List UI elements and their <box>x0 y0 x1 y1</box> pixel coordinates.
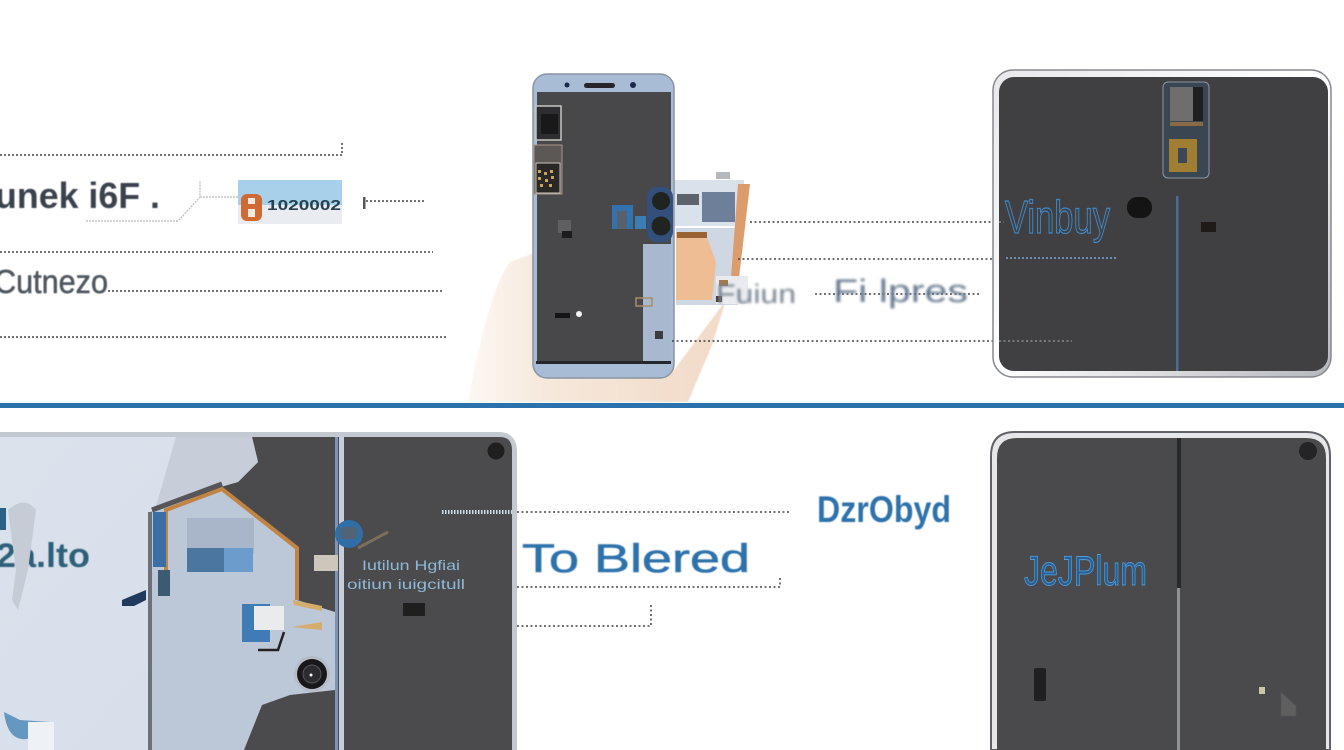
pale decorative marks <box>0 502 146 750</box>
centre label text: Fi lpres <box>833 273 968 309</box>
blue board block <box>187 518 254 572</box>
indicator dot <box>1259 687 1265 694</box>
blue sketched label on screen <box>1005 191 1117 258</box>
copper flex cable <box>166 489 297 600</box>
exploded internal module <box>674 172 750 305</box>
centre label text: Fuiun <box>716 279 796 309</box>
hand holding phone <box>468 253 726 402</box>
left leader lines, top section <box>0 142 446 337</box>
connector leader lines, centre <box>672 222 993 341</box>
blue board block with white label <box>242 600 322 650</box>
blue microtext on screen <box>347 557 465 592</box>
device: closed foldable, bottom right <box>991 432 1330 750</box>
camera hole <box>1127 197 1152 218</box>
lower leader lines <box>517 512 790 626</box>
callout: blue tag with orange badge: 1020002 <box>267 197 341 214</box>
right dotted hook <box>442 510 512 514</box>
blue sketched label on screen: Vinbuy <box>1005 191 1110 243</box>
label: To Blered: To Blered <box>522 537 750 581</box>
label: blue top text: DzrObyd <box>817 489 951 530</box>
round blue badge <box>314 520 388 571</box>
small sensor <box>1034 668 1046 701</box>
dotted lines over screen <box>999 222 1072 341</box>
callout: blue tag with orange badge <box>86 180 366 224</box>
fold hinge chip module <box>1163 82 1209 178</box>
divider bar <box>0 403 1344 408</box>
top-right notch icon <box>1299 442 1317 460</box>
camera lens <box>294 656 330 692</box>
blue screen label: JeJPlum <box>1024 547 1147 594</box>
device: unfolded cut-away, bottom left <box>0 432 517 750</box>
phone chip cluster <box>534 106 562 194</box>
phone blue glyph <box>612 205 646 229</box>
centre label text <box>716 273 968 309</box>
blue microtext on screen: oitiun iuigcitull <box>347 576 465 592</box>
dark sensor mark <box>403 603 425 616</box>
phone: front view with cut-away internals <box>533 74 674 378</box>
top-right notch icon <box>488 442 504 460</box>
blue microtext on screen: Iutilun Hgfiai <box>362 557 460 573</box>
phone small dark marks <box>555 220 663 339</box>
device: open foldable, top right <box>993 70 1331 377</box>
phone dual camera <box>647 187 673 242</box>
sensor mark <box>1201 222 1216 232</box>
